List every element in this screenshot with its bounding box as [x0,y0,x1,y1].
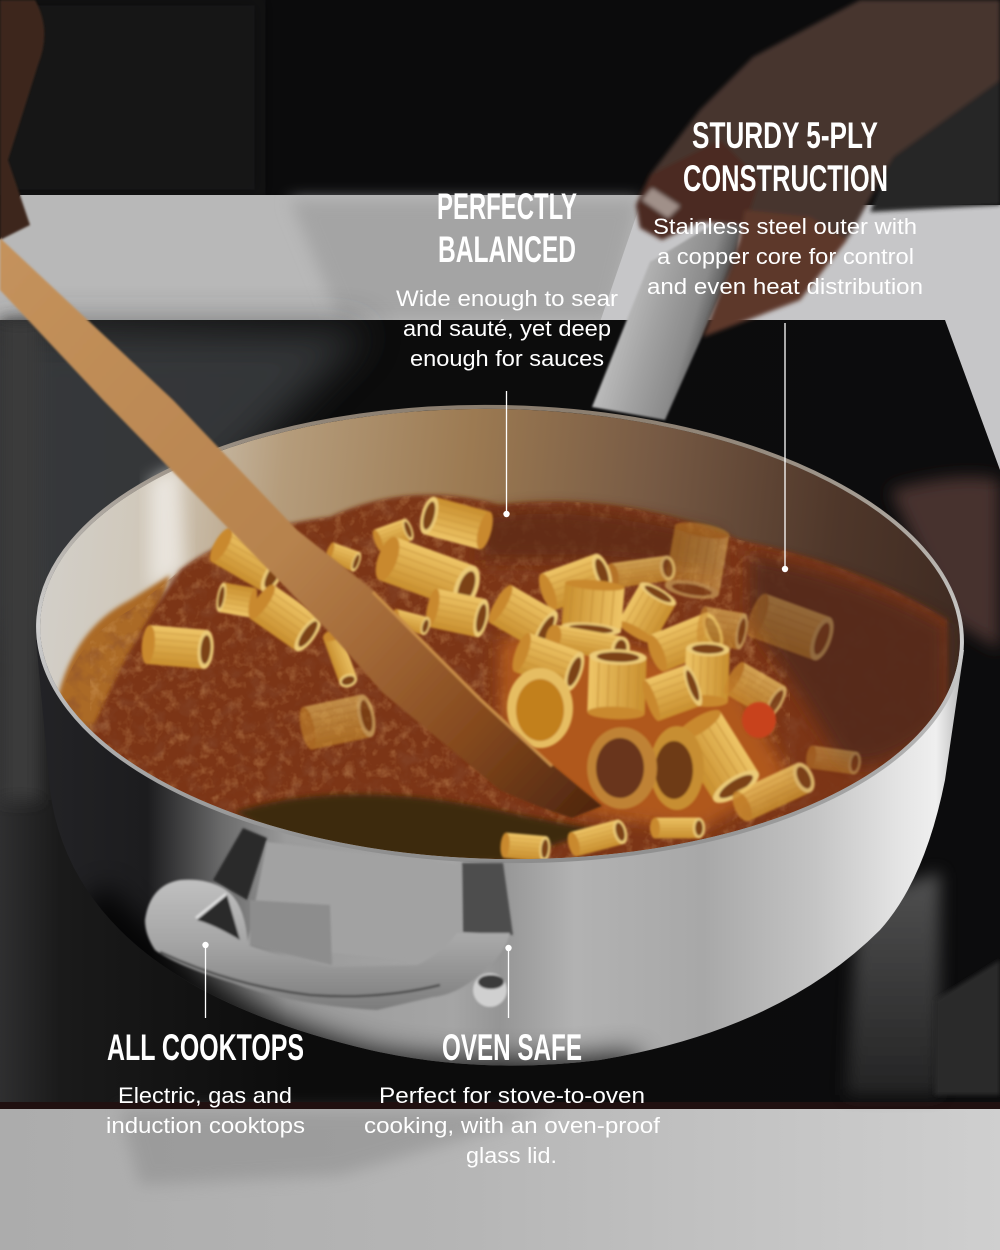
steam haze over sauce [750,555,947,765]
pan rim [33,397,967,871]
label: all cooktops [106,942,305,1138]
heading: ALL COOKTOPS [107,1027,304,1068]
side handle [145,828,513,1010]
interior highlight [150,465,185,590]
sleeve [870,78,1000,212]
sauce and pasta [55,480,950,870]
handle groove [160,952,440,996]
dark backdrop [0,0,1000,200]
splatter band [57,573,172,739]
saute pan [33,397,967,1083]
pointer [782,323,788,572]
pan juices [235,794,600,862]
heading: OVEN SAFE [442,1027,582,1068]
pointer [503,391,510,517]
sauce [90,495,947,860]
heading: PERFECTLY [437,186,577,227]
sauce texture [60,480,950,870]
heading: BALANCED [438,229,576,270]
hand [636,0,1000,337]
label: perfectly balanced [396,186,618,517]
cooktop reflection [846,872,940,1095]
description: Perfect for stove-to-oven [379,1083,645,1108]
handle loop [145,880,510,1010]
description: cooking, with an oven-proof [364,1113,661,1138]
heading: CONSTRUCTION [683,158,888,199]
rigatoni rings [507,668,704,810]
pan interior [35,399,965,869]
description: induction cooktops [106,1113,305,1138]
upper counter [0,195,650,320]
hand holding handle [636,0,1000,337]
handle straps [213,828,267,900]
fingernail [642,188,680,218]
description: glass lid. [466,1143,557,1168]
description: Stainless steel outer with [653,214,917,239]
label: sturdy 5-ply construction [647,115,923,572]
pan body [36,640,964,1083]
pointer [202,942,209,1018]
left hand [0,0,44,240]
description: enough for sauces [410,346,604,371]
tomato piece [742,702,776,738]
lower counter [0,1108,1000,1250]
description: a copper core for control [657,244,914,269]
wooden spoon [0,238,602,818]
rivet [473,973,507,1007]
description: and even heat distribution [647,274,923,299]
heading: STURDY 5-PLY [692,115,878,156]
description: Electric, gas and [118,1083,292,1108]
pointer [505,945,512,1018]
description: and sauté, yet deep [403,316,611,341]
fingers [636,140,760,240]
description: Wide enough to sear [396,286,618,311]
orange sauce under pasta [500,636,790,830]
handle highlight [196,894,226,918]
label: oven safe [364,945,661,1168]
black cooktop [0,320,1000,1105]
handle opening [197,895,240,940]
long pan handle [592,205,745,420]
rigatoni [140,495,862,862]
